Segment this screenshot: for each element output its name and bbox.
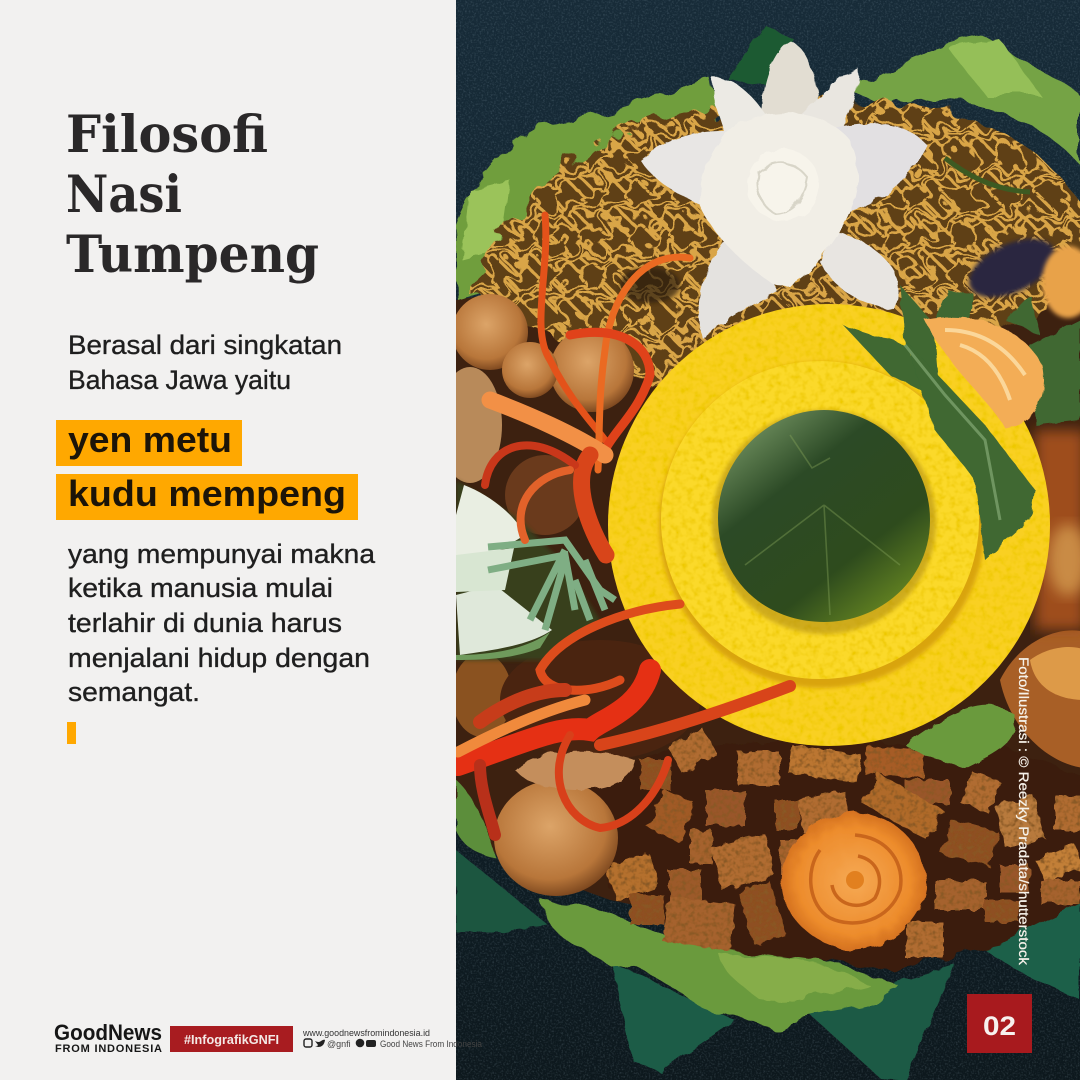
photo: nasi tumpeng (438, 0, 1080, 1080)
tan snacks beneath chili (515, 752, 635, 790)
fried noodles (470, 100, 1080, 380)
body text (68, 539, 375, 707)
title: Nasi (66, 165, 182, 225)
body text: yang mempunyai makna (68, 539, 375, 569)
photo credit: Foto/Ilustrasi : © Reezky Pradata/shutterstock (1016, 657, 1031, 965)
footer website and social links (302, 1028, 482, 1049)
icon: facebook (356, 1039, 364, 1047)
white carved flower (640, 42, 927, 338)
outer yellow rice tier (608, 304, 1050, 746)
food base under everything (456, 296, 1080, 904)
body text: terlahir di dunia harus (68, 608, 342, 638)
parsley leaves (843, 285, 1080, 560)
banana leaves at the bottom (456, 25, 1080, 1080)
photo background: dark table (456, 0, 1080, 1080)
title (66, 105, 319, 285)
parsley veins (905, 345, 1000, 520)
green vegetable sprig (488, 540, 615, 630)
page number badge: 02 (983, 1011, 1016, 1041)
icon: twitter (315, 1040, 325, 1047)
intro text: Berasal dari singkatan (68, 330, 342, 360)
footer website and social links: Good News From Indonesia (380, 1039, 482, 1049)
footer logo: GoodNews from Indonesia (54, 1020, 162, 1055)
highlight: kudu mempeng: kudu mempeng (68, 473, 346, 514)
footer logo: GoodNews from Indonesia: GoodNews (54, 1020, 162, 1045)
page number badge (967, 994, 1032, 1053)
fried snacks on the left side (438, 294, 700, 760)
body text: semangat. (68, 677, 200, 707)
banana-leaf cone (718, 410, 930, 622)
lettuce: lower rim (542, 900, 898, 1029)
footer website and social links: www.goodnewsfromindonesia.id (302, 1028, 430, 1038)
table grain (456, 0, 1080, 1080)
lettuce: top rim (456, 36, 1080, 300)
title: Filosofi (66, 105, 268, 165)
carrot flower petals (945, 330, 1025, 400)
left white vegetables (456, 480, 600, 660)
title: Tumpeng (66, 225, 319, 285)
carrot flower (925, 317, 1044, 428)
red chili garnish, upper (485, 215, 690, 555)
footer website and social links: @gnfi (327, 1039, 351, 1049)
body text: menjalani hidup dengan (68, 643, 370, 673)
shade under banana-leaf cone (712, 410, 936, 634)
icon: youtube (366, 1040, 376, 1047)
big fried ball (494, 780, 618, 896)
body text: ketika manusia mulai (68, 573, 333, 603)
shade between rice tiers (659, 362, 985, 688)
middle yellow rice tier (661, 361, 979, 679)
footer logo: GoodNews from Indonesia: FROM INDONESIA (55, 1043, 162, 1055)
dark burnt garnish on noodles (620, 158, 1080, 318)
tempeh chunks (605, 727, 1080, 958)
footer hashtag badge (170, 1026, 293, 1052)
right-side fried chicken (1000, 430, 1080, 768)
highlight: yen metu: yen metu (68, 419, 232, 460)
left lettuce strip (456, 780, 496, 858)
left panel background (0, 0, 457, 1080)
intro text: Bahasa Jawa yaitu (68, 365, 291, 395)
tempeh base (575, 741, 1080, 970)
icon: instagram (304, 1039, 312, 1047)
intro text (68, 330, 342, 395)
footer hashtag badge: #InfografikGNFI (184, 1032, 279, 1047)
red chili garnish, lower (458, 604, 790, 835)
carrot rose (782, 812, 926, 950)
parsley and carrot flower cluster (843, 285, 1080, 560)
orange end marker (67, 722, 76, 744)
small lettuce near rice (905, 706, 1016, 768)
